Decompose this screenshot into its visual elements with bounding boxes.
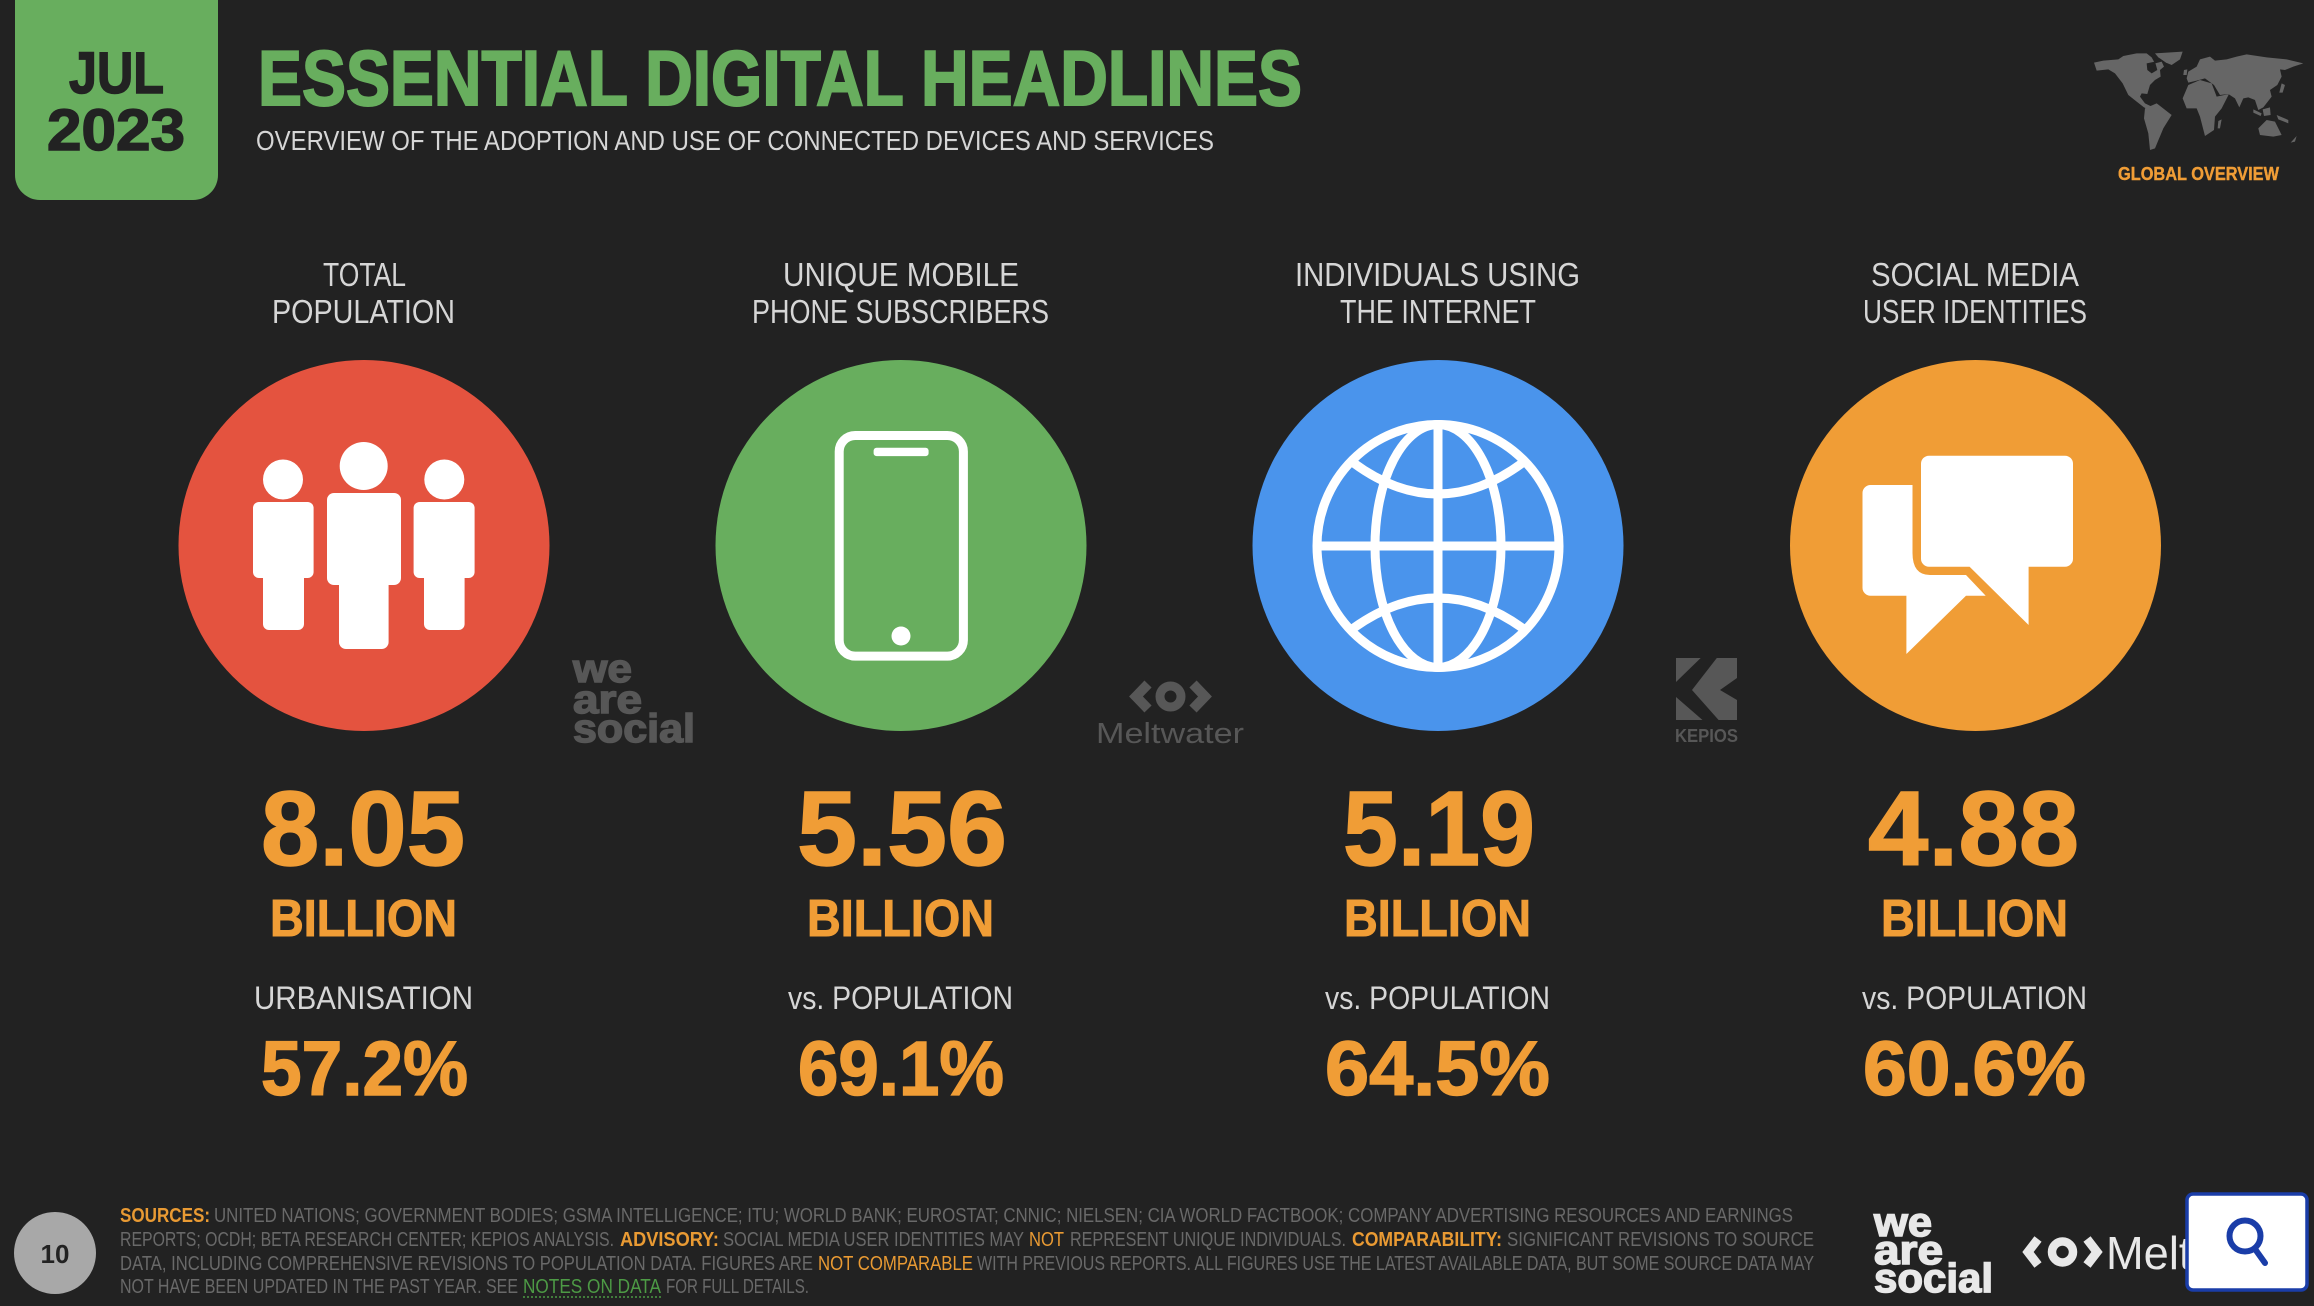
logo: we are social watermark: social: [573, 707, 695, 751]
footnote: [120, 1205, 1814, 1298]
logo: we are social: social: [1874, 1255, 1993, 1301]
footnote: FOR FULL DETAILS.: [666, 1276, 809, 1298]
footnote: NOT HAVE BEEN UPDATED IN THE PAST YEAR. SEE: [120, 1276, 518, 1298]
footnote: WITH PREVIOUS REPORTS. ALL FIGURES USE THE LATEST AVAILABLE DATA, BUT SOME SOURCE DATA MAY: [977, 1253, 1814, 1275]
footnote: NOT COMPARABLE: [818, 1253, 973, 1275]
value: 8.05: [261, 770, 465, 888]
footnote: NOT: [1029, 1229, 1064, 1251]
page number: 10: [41, 1239, 69, 1269]
logo: Meltwater watermark: Meltwater: [1096, 718, 1244, 750]
logo: we are social watermark: [572, 647, 695, 751]
footnote: SOCIAL MEDIA USER IDENTITIES MAY: [723, 1229, 1024, 1251]
heading: PHONE SUBSCRIBERS: [752, 293, 1049, 330]
footnote: COMPARABILITY:: [1352, 1229, 1502, 1251]
logo: we are social: we: [1873, 1199, 1932, 1245]
panel: mobile subscribers: [716, 256, 1086, 1112]
sub label: vs. POPULATION: [1862, 980, 2087, 1016]
heading: [752, 256, 1049, 330]
footnote: UNITED NATIONS; GOVERNMENT BODIES; GSMA INTELLIGENCE; ITU; WORLD BANK; EUROSTAT; CNNIC; NIELSEN; CIA WORLD FACTBOOK; COMPANY ADVERTISING RESOURCES AND EARNINGS: [214, 1205, 1793, 1227]
circle icon: people: [178, 360, 550, 731]
heading: [1863, 256, 2087, 330]
circle icon: speech bubbles: [1790, 360, 2161, 731]
value: 5.19: [1343, 770, 1535, 888]
footnote: SOURCES:: [120, 1205, 210, 1227]
world map: [2094, 52, 2303, 150]
footnote: DATA, INCLUDING COMPREHENSIVE REVISIONS TO POPULATION DATA. FIGURES ARE: [120, 1253, 813, 1275]
unit: BILLION: [270, 890, 457, 948]
region label: GLOBAL OVERVIEW: [2118, 163, 2279, 184]
subtitle: OVERVIEW OF THE ADOPTION AND USE OF CONNECTED DEVICES AND SERVICES: [256, 125, 1214, 156]
date tab: JUL: [69, 41, 164, 106]
sub label: vs. POPULATION: [788, 980, 1013, 1016]
circle icon: globe: [1252, 360, 1624, 731]
logo: Meltwater watermark: [1096, 684, 1244, 750]
heading: UNIQUE MOBILE: [783, 256, 1019, 293]
circle icon: phone: [716, 360, 1086, 731]
panel: social media: [1790, 256, 2161, 1112]
date tab: [15, 0, 218, 200]
sub label: vs. POPULATION: [1325, 980, 1550, 1016]
percentage: 69.1%: [798, 1026, 1004, 1112]
value: 4.88: [1868, 770, 2079, 888]
heading: TOTAL: [323, 256, 406, 293]
percentage: 64.5%: [1325, 1026, 1550, 1112]
percentage: 57.2%: [261, 1026, 468, 1112]
search button: [2187, 1194, 2307, 1290]
logo: we are social watermark: are: [573, 678, 642, 722]
footnote: NOTES ON DATA: [523, 1276, 662, 1298]
heading: POPULATION: [272, 293, 455, 330]
sub label: URBANISATION: [254, 980, 473, 1016]
logo: Meltwater: Meltwater: [2106, 1227, 2302, 1279]
footnote: SIGNIFICANT REVISIONS TO SOURCE: [1507, 1229, 1814, 1251]
logo: Kepios watermark: [1675, 658, 1738, 746]
panel: internet users: [1252, 256, 1624, 1112]
heading: SOCIAL MEDIA: [1871, 256, 2079, 293]
heading: [1295, 256, 1580, 330]
value: 5.56: [797, 770, 1007, 888]
heading: INDIVIDUALS USING: [1295, 256, 1580, 293]
footnote: ADVISORY:: [620, 1229, 719, 1251]
heading: USER IDENTITIES: [1863, 293, 2087, 330]
date tab: 2023: [47, 98, 185, 163]
title: ESSENTIAL DIGITAL HEADLINES: [258, 34, 1302, 122]
percentage: 60.6%: [1863, 1026, 2086, 1112]
logo: Kepios watermark: KEPIOS: [1675, 726, 1738, 746]
footnote: REPRESENT UNIQUE INDIVIDUALS.: [1070, 1229, 1346, 1251]
unit: BILLION: [1344, 890, 1531, 948]
footnote: REPORTS; OCDH; BETA RESEARCH CENTER; KEPIOS ANALYSIS.: [120, 1229, 614, 1251]
heading: THE INTERNET: [1340, 293, 1536, 330]
heading: [272, 256, 455, 330]
unit: BILLION: [1881, 890, 2068, 948]
logo: we are social watermark: we: [572, 647, 632, 691]
page number: [14, 1212, 96, 1294]
unit: BILLION: [807, 890, 994, 948]
panel: total population: [178, 256, 550, 1112]
logo: we are social: are: [1874, 1227, 1943, 1273]
logo: we are social: [1873, 1199, 1993, 1301]
